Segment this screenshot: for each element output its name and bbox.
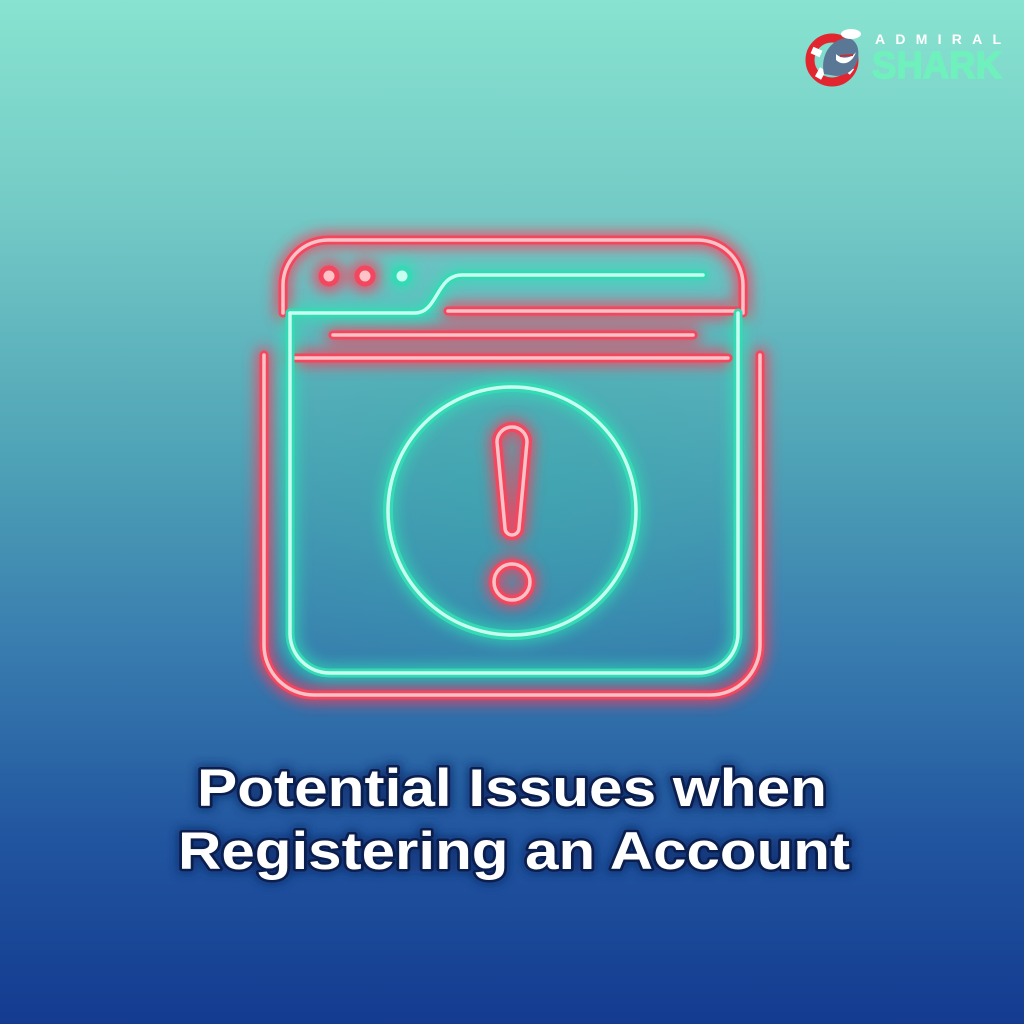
title: Registering an Account <box>178 822 850 881</box>
window interior tint <box>290 313 738 673</box>
teal glow layer <box>290 268 738 673</box>
panel: teal window <box>290 275 738 673</box>
red glow layer <box>264 240 760 695</box>
title: Registering an Account <box>178 822 850 881</box>
icon: lifebuoy with shark <box>810 29 861 82</box>
icon: neon browser window with warning <box>264 240 760 695</box>
text: ADMIRAL: ADMIRAL <box>875 31 1001 47</box>
title: Potential Issues when <box>197 759 827 818</box>
logo: Admiral Shark <box>810 29 1003 87</box>
title: Potential Issues when <box>197 759 827 818</box>
icon: window dots <box>321 268 410 284</box>
text: SHARK: SHARK <box>872 45 1003 87</box>
panel: outer red frame <box>264 240 760 695</box>
icon: exclamation mark <box>494 427 530 600</box>
title <box>178 759 850 881</box>
icon: warning circle <box>388 387 636 635</box>
